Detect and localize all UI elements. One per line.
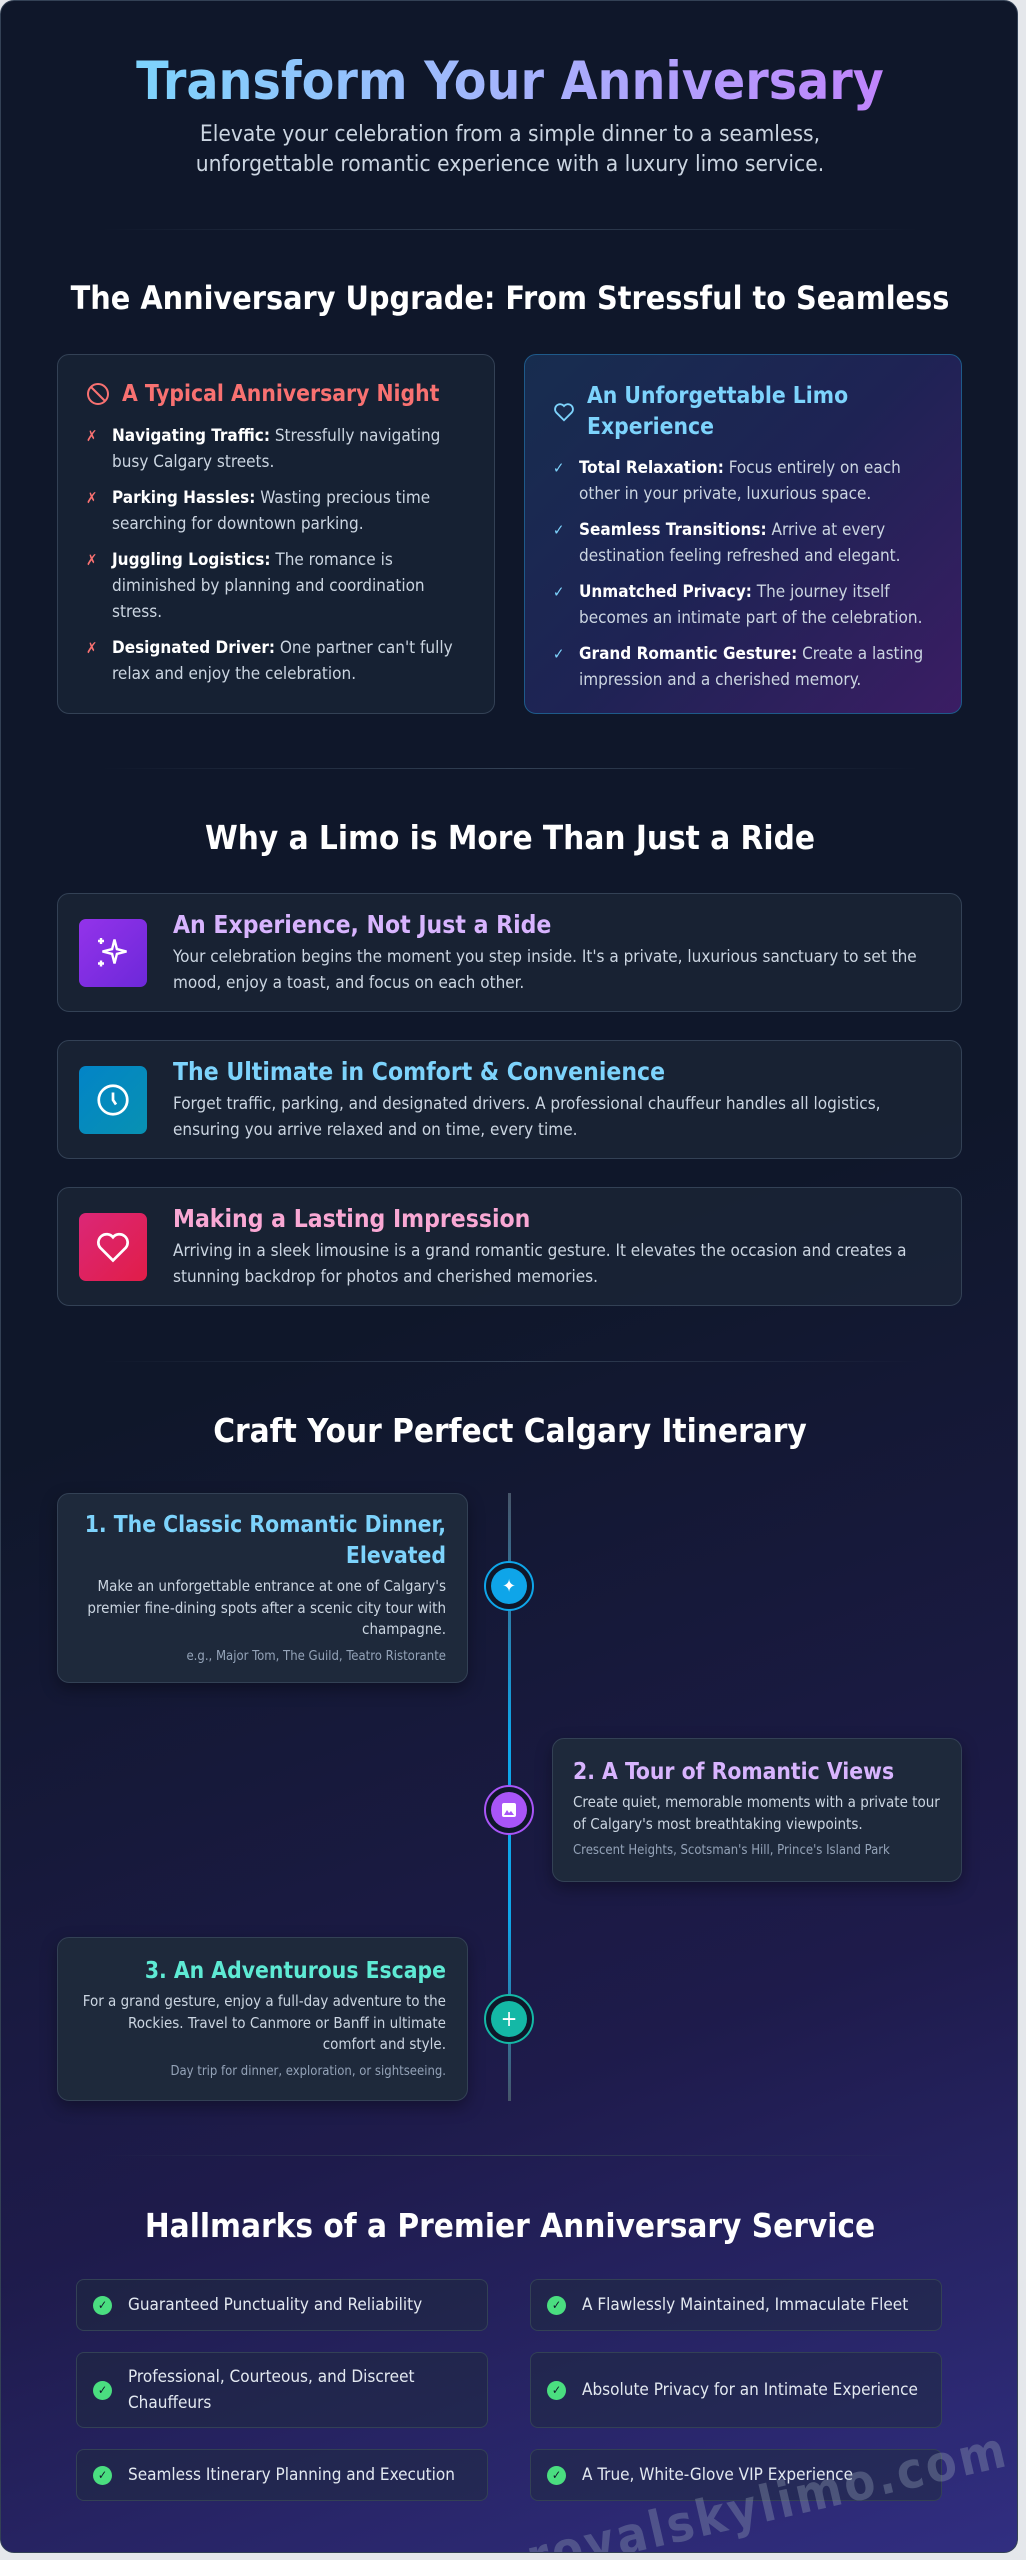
- panel heading: limo: Experience: [587, 414, 714, 440]
- feature: comfort: [57, 1040, 962, 1159]
- list: benefits: [553, 458, 923, 690]
- list: benefits: Seamless Transitions: Arrive at every destination feeling refreshed and elegant.: [579, 520, 901, 566]
- hallmark items: A Flawlessly Maintained, Immaculate Fleet: [582, 2295, 908, 2315]
- timeline card 3: 3. An Adventurous Escape: [145, 1958, 446, 1984]
- feature: impression: Making a Lasting Impression: [173, 1204, 530, 1233]
- heading: itinerary: Craft Your Perfect Calgary Itinerary: [213, 1411, 807, 1450]
- hallmark items: [76, 2279, 942, 2501]
- feature: comfort: Forget traffic, parking, and designated drivers. A professional chauffeur handles all logistics, ensuring you arrive relaxed and on time, every time.: [173, 1094, 881, 1140]
- timeline card 2: 2. A Tour of Romantic Views: [573, 1759, 894, 1785]
- list: problems: Designated Driver: One partner can't fully relax and enjoy the celebration.: [112, 638, 453, 684]
- hallmark items: ✓: [98, 2468, 107, 2482]
- list: problems: Juggling Logistics: The romance is diminished by planning and coordination stress.: [112, 550, 425, 622]
- hallmark items: ✓: [552, 2298, 561, 2312]
- timeline card 1: Make an unforgettable entrance at one of Calgary's premier fine-dining spots after a scenic city tour with champagne.: [87, 1577, 446, 1638]
- timeline card 3: Day trip for dinner, exploration, or sightseeing.: [170, 2064, 446, 2078]
- list: benefits: Grand Romantic Gesture: Create a lasting impression and a cherished memory.: [579, 644, 923, 690]
- list: benefits: Total Relaxation: Focus entirely on each other in your private, luxurious space.: [579, 458, 901, 504]
- timeline card 2: Crescent Heights, Scotsman's Hill, Prince's Island Park: [573, 1843, 890, 1858]
- feature: experience: Your celebration begins the moment you step inside. It's a private, luxurious sanctuary to set the mood, enjoy a toast, and focus on each other.: [173, 947, 917, 993]
- hallmark items: ✓: [552, 2468, 561, 2482]
- timeline icon 2: [484, 1785, 534, 1835]
- hallmark items: ✓: [98, 2298, 107, 2312]
- list: benefits: ✓: [553, 645, 564, 663]
- hallmark items: Guaranteed Punctuality and Reliability: [128, 2295, 422, 2315]
- hallmark items: A True, White-Glove VIP Experience: [582, 2465, 853, 2485]
- timeline icon 1: ✦: [502, 1576, 516, 1596]
- panel heading: limo: [554, 383, 848, 440]
- timeline card 3: [57, 1937, 468, 2101]
- timeline icon 3: [484, 1994, 534, 2044]
- list: problems: ✗: [86, 489, 97, 507]
- list: problems: Parking Hassles: Wasting precious time searching for downtown parking.: [112, 488, 430, 534]
- list: benefits: Unmatched Privacy: The journey itself becomes an intimate part of the celebration.: [579, 582, 922, 628]
- title: Transform Your Anniversary: [136, 51, 884, 112]
- timeline card 1: e.g., Major Tom, The Guild, Teatro Ristorante: [186, 1648, 446, 1664]
- panel: typical night: [57, 354, 495, 714]
- list: benefits: ✓: [553, 459, 564, 477]
- list: problems: ✗: [86, 639, 97, 657]
- feature: impression: Arriving in a sleek limousine is a grand romantic gesture. It elevates the occasion and creates a stunning backdrop for photos and cherished memories.: [173, 1241, 906, 1287]
- feature: comfort: The Ultimate in Comfort & Convenience: [173, 1057, 665, 1086]
- feature: experience: [57, 893, 962, 1012]
- heading: upgrade: The Anniversary Upgrade: From Stressful to Seamless: [71, 279, 949, 317]
- panel: limo experience: [524, 354, 962, 714]
- icon: sparkles: [79, 919, 147, 987]
- timeline icon 1: [484, 1561, 534, 1611]
- hallmark items: Absolute Privacy for an Intimate Experience: [582, 2380, 918, 2400]
- heading: why limo: Why a Limo is More Than Just a Ride: [205, 818, 815, 857]
- heading: hallmarks: Hallmarks of a Premier Anniversary Service: [145, 2206, 875, 2245]
- hallmark items: Seamless Itinerary Planning and Execution: [128, 2465, 455, 2485]
- hallmark items: Professional, Courteous, and Discreet Chauffeurs: [128, 2367, 414, 2413]
- list: problems: ✗: [86, 427, 97, 445]
- timeline card 2: Create quiet, memorable moments with a private tour of Calgary's most breathtaking viewpoints.: [573, 1793, 940, 1832]
- timeline card 3: For a grand gesture, enjoy a full-day adventure to the Rockies. Travel to Canmore or Banff in ultimate comfort and style.: [83, 1992, 446, 2053]
- list: benefits: ✓: [553, 521, 564, 539]
- timeline line: [508, 1493, 511, 2101]
- subtitle: unforgettable romantic experience with a luxury limo service.: [196, 151, 824, 177]
- feature: experience: An Experience, Not Just a Ride: [173, 910, 551, 939]
- timeline card 1: [57, 1493, 468, 1683]
- timeline icon 3: +: [501, 2006, 517, 2032]
- list: benefits: ✓: [553, 583, 564, 601]
- list: problems: Navigating Traffic: Stressfully navigating busy Calgary streets.: [112, 426, 440, 472]
- panel heading: typical: A Typical Anniversary Night: [122, 381, 439, 407]
- hallmark items: ✓: [98, 2383, 107, 2397]
- list: problems: [86, 426, 453, 684]
- timeline card 2: [552, 1738, 962, 1882]
- subtitle: [196, 121, 824, 177]
- panel heading: limo: An Unforgettable Limo: [587, 383, 848, 409]
- list: problems: ✗: [86, 551, 97, 569]
- icon: heart: [79, 1213, 147, 1281]
- feature: impression: [57, 1187, 962, 1306]
- icon: clock: [79, 1066, 147, 1134]
- hallmark items: ✓: [552, 2383, 561, 2397]
- timeline card 1: 1. The Classic Romantic Dinner, Elevated: [85, 1512, 446, 1569]
- subtitle: Elevate your celebration from a simple dinner to a seamless,: [200, 121, 820, 147]
